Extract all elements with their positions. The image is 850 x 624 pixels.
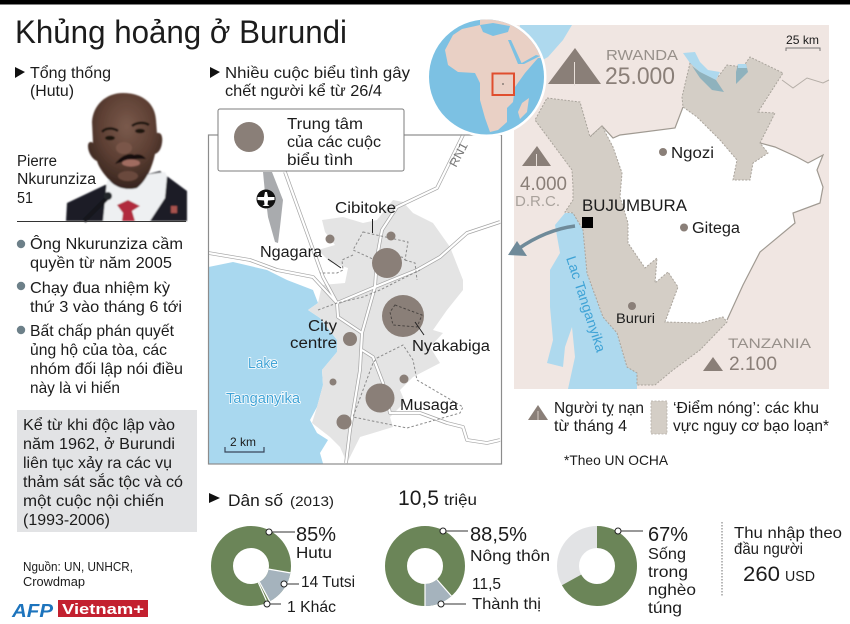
map place labels: Cibitoke — [335, 200, 396, 217]
donut chart: rural and urban: 11,5 — [472, 576, 501, 593]
scale bar: 25 km: 25 km — [786, 33, 819, 47]
lake Tanganyika — [547, 213, 637, 389]
capital: Bujumbura: BUJUMBURA — [582, 196, 688, 215]
top black bar — [0, 0, 850, 4]
icon: airport — [256, 190, 276, 208]
donut chart: poverty — [568, 524, 696, 617]
district boundaries — [318, 232, 463, 428]
donut chart: ethnic groups: 85% — [296, 524, 336, 546]
callout: history box: một cuộc nội chiến — [23, 493, 164, 510]
legend: refugees and hotspots: từ tháng 4 — [554, 418, 627, 435]
city: Ngozi: Ngozi — [671, 145, 714, 162]
legend: protest centres: biểu tình — [287, 151, 353, 169]
income per capita — [734, 525, 842, 586]
legend: refugees and hotspots: Người tỵ nạn — [554, 400, 644, 417]
donut chart: poverty: trong — [648, 564, 688, 581]
logo: AFP Vietnam+: AFP — [11, 601, 54, 621]
portrait photo — [66, 93, 187, 221]
lake label: Lake — [248, 356, 278, 372]
callout: history box: liên tục xảy ra các vụ — [23, 455, 172, 472]
heading: population: Dân số — [228, 491, 284, 510]
map place labels: Nyakabiga — [412, 338, 490, 355]
heading: population — [209, 491, 334, 510]
refugees: D.R.C. — [515, 146, 567, 210]
bullet list: Ông Nkurunziza cầm — [30, 234, 183, 253]
protest map heading: Nhiều cuộc biểu tình gây — [225, 64, 410, 82]
refugees: D.R.C.: D.R.C. — [515, 193, 560, 210]
airport strip — [263, 172, 283, 243]
callout: history box: Kể từ khi độc lập vào — [23, 416, 175, 434]
capital: Bujumbura — [582, 196, 688, 228]
logo: AFP Vietnam+ — [11, 600, 148, 621]
map place labels — [260, 200, 490, 414]
bullet list: thứ 3 vào tháng 6 tới — [30, 299, 182, 316]
refugees: Tanzania — [703, 335, 812, 375]
refugees: D.R.C.: 4.000 — [520, 174, 567, 195]
protest map heading: chết người kể từ 26/4 — [225, 82, 382, 100]
source note — [23, 559, 133, 589]
city: Bururi: Bururi — [616, 311, 655, 326]
water top — [514, 25, 572, 70]
refugees: Rwanda: RWANDA — [606, 48, 678, 64]
northern lakes — [683, 52, 748, 92]
bullet list: quyền từ năm 2005 — [30, 255, 172, 272]
income per capita: USD — [785, 568, 815, 585]
refugees: Rwanda: 25.000 — [605, 63, 675, 90]
panel: president — [15, 64, 187, 397]
map place labels: Ngagara — [260, 244, 322, 261]
arrow: to city map — [508, 226, 575, 256]
lake — [208, 262, 337, 464]
donut chart: poverty: Sống — [648, 546, 686, 563]
refugees: Rwanda — [548, 48, 678, 90]
globe locator — [429, 20, 546, 136]
total population — [398, 487, 477, 510]
map place labels: centre — [290, 335, 337, 352]
legend: protest centres: Trung tâm — [287, 116, 363, 133]
map place labels: Musaga — [400, 397, 458, 414]
refugees: Tanzania: 2.100 — [729, 354, 777, 375]
lake label — [226, 356, 301, 407]
legend: refugees and hotspots: ‘Điểm nóng’: các khu — [673, 400, 819, 417]
donut chart: ethnic groups — [217, 524, 355, 616]
legend: refugees and hotspots: vực nguy cơ bạo loạn* — [673, 418, 829, 435]
president heading: (Hutu) — [30, 83, 74, 100]
donut chart: rural and urban: Nông thôn — [470, 548, 550, 565]
total population: triệu — [444, 492, 477, 509]
donut chart: poverty: 67% — [648, 524, 688, 546]
callout: history box: năm 1962, ở Burundi — [23, 436, 175, 453]
legend: refugees and hotspots — [528, 400, 829, 435]
map background — [514, 25, 829, 389]
president name and age — [17, 153, 96, 207]
bullet list: nhóm đối lập nói điều — [30, 361, 183, 378]
donut chart: ethnic groups: 14 Tutsi — [301, 574, 355, 591]
heading: population: (2013) — [290, 493, 334, 509]
lake label: Lac Tanganyika — [563, 254, 609, 354]
city: Gitega: Gitega — [692, 220, 740, 237]
president name and age: Nkurunziza — [17, 171, 96, 188]
donut chart: rural and urban: Thành thị — [472, 596, 541, 613]
callout: history box — [17, 410, 197, 532]
income per capita: Thu nhập theo — [734, 525, 842, 542]
bullet list — [17, 234, 183, 397]
donut chart: ethnic groups: 1 Khác — [287, 599, 336, 616]
scale bar: 2 km — [225, 435, 264, 452]
roads — [208, 135, 500, 463]
legend: protest centres: của các cuộc — [287, 134, 381, 151]
city: Bururi — [616, 302, 655, 326]
bullet list: Bất chấp phán quyết — [30, 323, 175, 340]
logo: AFP Vietnam+: Vietnam+ — [62, 601, 144, 618]
donut chart: rural and urban — [384, 524, 550, 613]
panel: Burundi map — [426, 10, 829, 389]
panel: protest map — [208, 64, 502, 464]
bullet list: Chạy đua nhiệm kỳ — [30, 280, 170, 297]
total population: 10,5 — [398, 487, 439, 510]
income per capita: 260 — [743, 563, 780, 586]
callout: history box: (1993-2006) — [23, 512, 110, 529]
bullet list: ủng hộ của tòa, các — [30, 342, 167, 359]
title: Khủng hoảng ở Burundi — [15, 14, 347, 50]
map place labels: City — [308, 318, 337, 335]
president name and age: 51 — [17, 190, 33, 207]
president heading: Tổng thống — [30, 64, 111, 82]
hotspot zones — [535, 57, 783, 385]
source note: Crowdmap — [23, 574, 85, 589]
president heading — [15, 64, 111, 100]
protest centre circles — [326, 232, 424, 430]
lake label: Tanganyika — [226, 391, 301, 407]
source note: Nguồn: UN, UNHCR, — [23, 559, 133, 574]
president name and age: Pierre — [17, 153, 57, 170]
bullet list: này là vi hiến — [30, 380, 120, 397]
income per capita: đầu người — [734, 541, 803, 558]
urban area — [308, 200, 463, 463]
donut chart: poverty: túng — [648, 600, 682, 617]
legend: protest centres — [218, 109, 404, 171]
donut chart: ethnic groups: Hutu — [296, 545, 332, 562]
donut chart: poverty: nghèo — [648, 582, 696, 599]
Burundi territory — [535, 57, 823, 385]
scale bar: 2 km: 2 km — [230, 435, 256, 449]
callout: history box: thảm sát sắc tộc và có — [23, 472, 183, 491]
footnote: *Theo UN OCHA — [564, 452, 669, 468]
protest map heading — [210, 64, 410, 100]
road label RN1: RN1 — [446, 140, 471, 169]
donut chart: rural and urban: 88,5% — [470, 524, 527, 546]
refugees: Tanzania: TANZANIA — [728, 335, 812, 351]
